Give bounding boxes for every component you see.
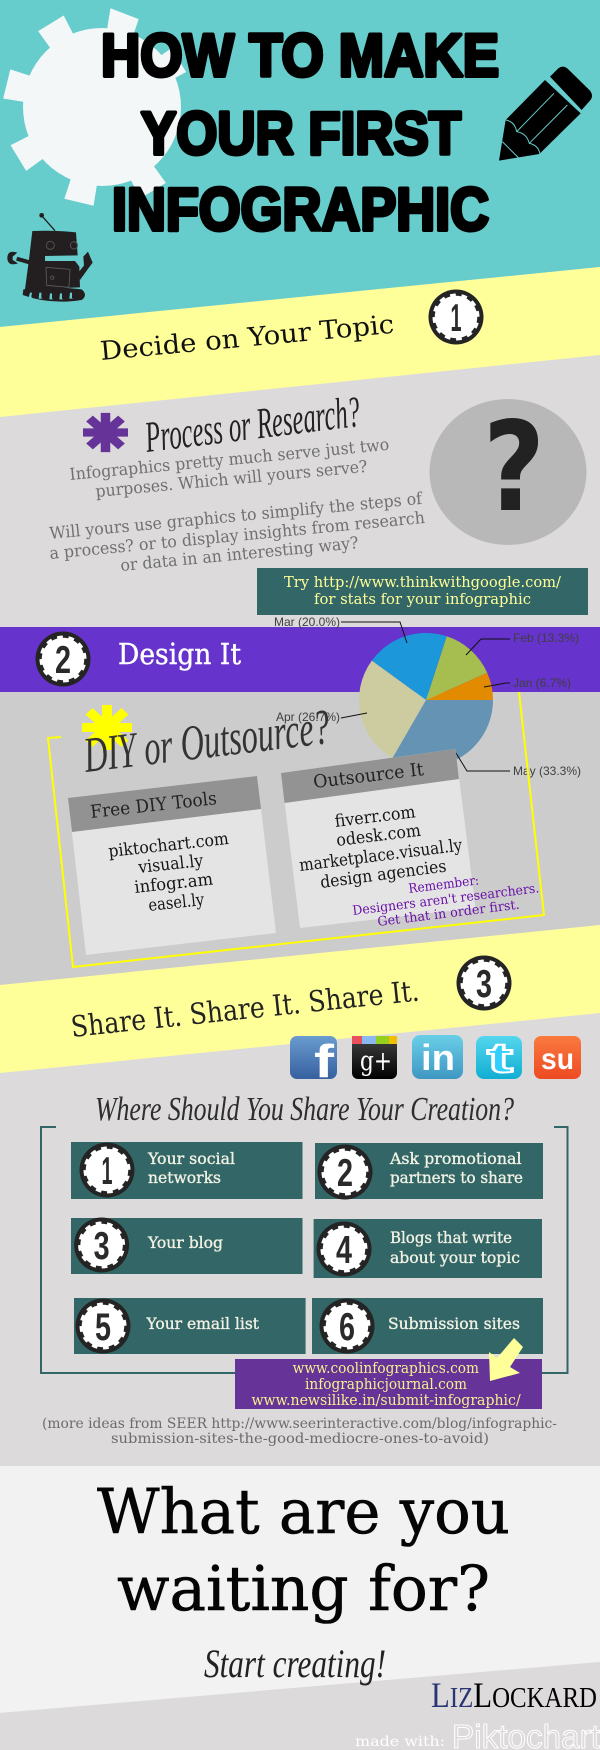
pie chart: Feb (13.3%) <box>513 631 579 645</box>
panel: closing section background <box>0 1466 600 1713</box>
panel: share item 4 <box>314 1219 542 1278</box>
icon: twitter: t <box>487 1034 513 1081</box>
heading: what are you waiting for: waiting for? <box>117 1552 490 1625</box>
icon: twitter <box>476 1034 522 1081</box>
icon: robot <box>7 213 93 302</box>
panel: share item 4: about your topic <box>390 1249 520 1267</box>
icon: question mark circle <box>430 396 586 545</box>
heading: what are you waiting for <box>97 1475 510 1625</box>
callout: think with google: Try http://www.thinkwithgoogle.com/ <box>284 575 561 591</box>
panel: yellow band step 1 <box>0 267 600 417</box>
title: INFOGRAPHIC <box>112 176 489 243</box>
icon: linkedin: in <box>421 1037 455 1078</box>
callout: remember note: Designers aren't researchers. <box>352 881 540 919</box>
callout: submission sites list: infographicjournal.com <box>305 1377 467 1393</box>
text block: infographic purposes <box>49 435 426 575</box>
panel: share item 2: 2 <box>337 1152 353 1195</box>
icon: linkedin <box>412 1035 463 1079</box>
heading: what are you waiting for: What are you <box>97 1475 510 1548</box>
panel: free DIY tools: piktochart.com <box>107 829 230 862</box>
panel: share item 1: Your social <box>147 1150 235 1168</box>
icon: gear <box>3 8 186 206</box>
panel: share item 5: Your email list <box>146 1315 260 1333</box>
icon: google plus: g+ <box>360 1046 392 1077</box>
panel: outsource it: Outsource It <box>312 759 426 793</box>
text block: infographic purposes: Will yours use graphics to simplify the steps of <box>49 489 425 543</box>
text block: start creating: Start creating! <box>204 1641 386 1686</box>
icon: number badge 2 <box>36 632 90 686</box>
logo: made with piktochart: made with: <box>355 1734 445 1750</box>
heading: share it: Share It. Share It. Share It. <box>69 974 421 1044</box>
panel: outsource it: fiverr.com <box>334 802 417 832</box>
callout: think with google <box>257 568 588 615</box>
icon: question mark circle: ? <box>483 396 545 540</box>
panel: share item 1: 1 <box>102 1150 112 1193</box>
icon: yellow asterisk <box>82 705 132 750</box>
panel: share item 2: partners to share <box>390 1169 523 1187</box>
panel: footer background <box>0 1662 600 1750</box>
text block: infographic purposes: purposes. Which will yours serve? <box>95 457 368 501</box>
panel: free DIY tools: infogr.am <box>133 870 214 898</box>
logo: made with piktochart <box>355 1718 600 1750</box>
panel: share item 4: 4 <box>336 1229 352 1272</box>
callout: submission sites list: www.newsilike.in/submit-infographic/ <box>252 1393 521 1409</box>
icon: number badge 3 <box>456 956 512 1010</box>
panel: share item 5 <box>74 1298 306 1354</box>
panel: share section background <box>0 1010 600 1470</box>
text block: more ideas: (more ideas from SEER http://www.seerinteractive.com/blog/infographic- <box>42 1416 557 1432</box>
icon: number badge 1: 1 <box>450 297 462 340</box>
icon: stumbleupon: su <box>541 1043 574 1076</box>
panel: share item 6 <box>312 1298 543 1354</box>
panel: share item 2 <box>315 1143 543 1200</box>
bracket: teal outline <box>41 1127 568 1373</box>
callout: remember note <box>352 873 540 930</box>
panel: share item 6: 6 <box>339 1306 355 1349</box>
heading: DIY or outsource: DIY or Outsource? <box>80 698 333 783</box>
panel: share item 6: Submission sites <box>388 1315 520 1333</box>
heading: process or research: Process or Research? <box>142 387 363 462</box>
panel: outsource it: marketplace.visual.ly <box>298 836 464 876</box>
text block: more ideas: submission-sites-the-good-mediocre-ones-to-avoid) <box>111 1431 489 1447</box>
title: HOW TO MAKE <box>101 22 499 89</box>
panel: free DIY tools: easel.ly <box>147 890 206 916</box>
callout: submission sites list <box>235 1359 542 1409</box>
panel: topic section background <box>0 340 600 630</box>
panel: share item 5: 5 <box>95 1306 111 1349</box>
panel: share item 3: Your blog <box>147 1234 223 1252</box>
pie chart <box>274 615 581 778</box>
panel: share item 3 <box>71 1218 302 1274</box>
panel: yellow band step 3 <box>0 925 600 1073</box>
panel: header background <box>0 0 600 327</box>
bracket: yellow outline <box>48 692 544 967</box>
icon: google plus <box>352 1036 397 1079</box>
callout: think with google: for stats for your infographic <box>314 592 531 608</box>
pie chart: Mar (20.0%) <box>274 615 340 629</box>
panel: design section background <box>0 690 600 1030</box>
icon: number badge 3: 3 <box>476 963 492 1006</box>
pie chart: May (33.3%) <box>513 764 581 778</box>
pie chart: Jan (6.7%) <box>513 676 571 690</box>
panel: share item 1 <box>71 1142 302 1199</box>
icon: pencil <box>499 67 592 161</box>
panel: outsource it: design agencies <box>319 857 448 893</box>
panel: free DIY tools: visual.ly <box>136 851 205 878</box>
title: YOUR FIRST <box>141 100 461 167</box>
icon: facebook: f <box>314 1035 335 1087</box>
icon: yellow arrow <box>489 1338 523 1381</box>
panel: share item 1: networks <box>148 1169 221 1187</box>
panel: outsource it <box>281 749 476 928</box>
panel: outsource it: odesk.com <box>335 821 422 851</box>
panel: free DIY tools: Free DIY Tools <box>89 788 218 823</box>
heading: design it: Design It <box>118 637 241 671</box>
text block: infographic purposes: or data in an interesting way? <box>120 533 359 575</box>
heading: decide on your topic: Decide on Your Topic <box>99 310 395 367</box>
icon: number badge 2: 2 <box>55 639 71 682</box>
text block: infographic purposes: a process? or to display insights from research <box>49 508 426 563</box>
icon: stumbleupon <box>534 1036 581 1079</box>
panel: share item 4: Blogs that write <box>390 1229 512 1247</box>
callout: submission sites list: www.coolinfographics.com <box>293 1361 479 1377</box>
pie chart: Apr (26.7%) <box>276 710 340 724</box>
text block: infographic purposes: Infographics pretty much serve just two <box>69 435 390 484</box>
panel: purple band step 2 <box>0 627 600 692</box>
callout: remember note: Get that in order first. <box>377 898 520 930</box>
icon: facebook <box>290 1035 337 1087</box>
title <box>101 22 499 243</box>
icon: purple asterisk <box>83 413 128 452</box>
panel: free DIY tools <box>68 776 276 955</box>
panel: share item 2: Ask promotional <box>389 1150 522 1168</box>
text block: more ideas <box>42 1416 557 1447</box>
icon: number badge 1 <box>428 290 484 344</box>
callout: remember note: Remember: <box>408 873 480 897</box>
panel: share item 3: 3 <box>94 1225 110 1268</box>
